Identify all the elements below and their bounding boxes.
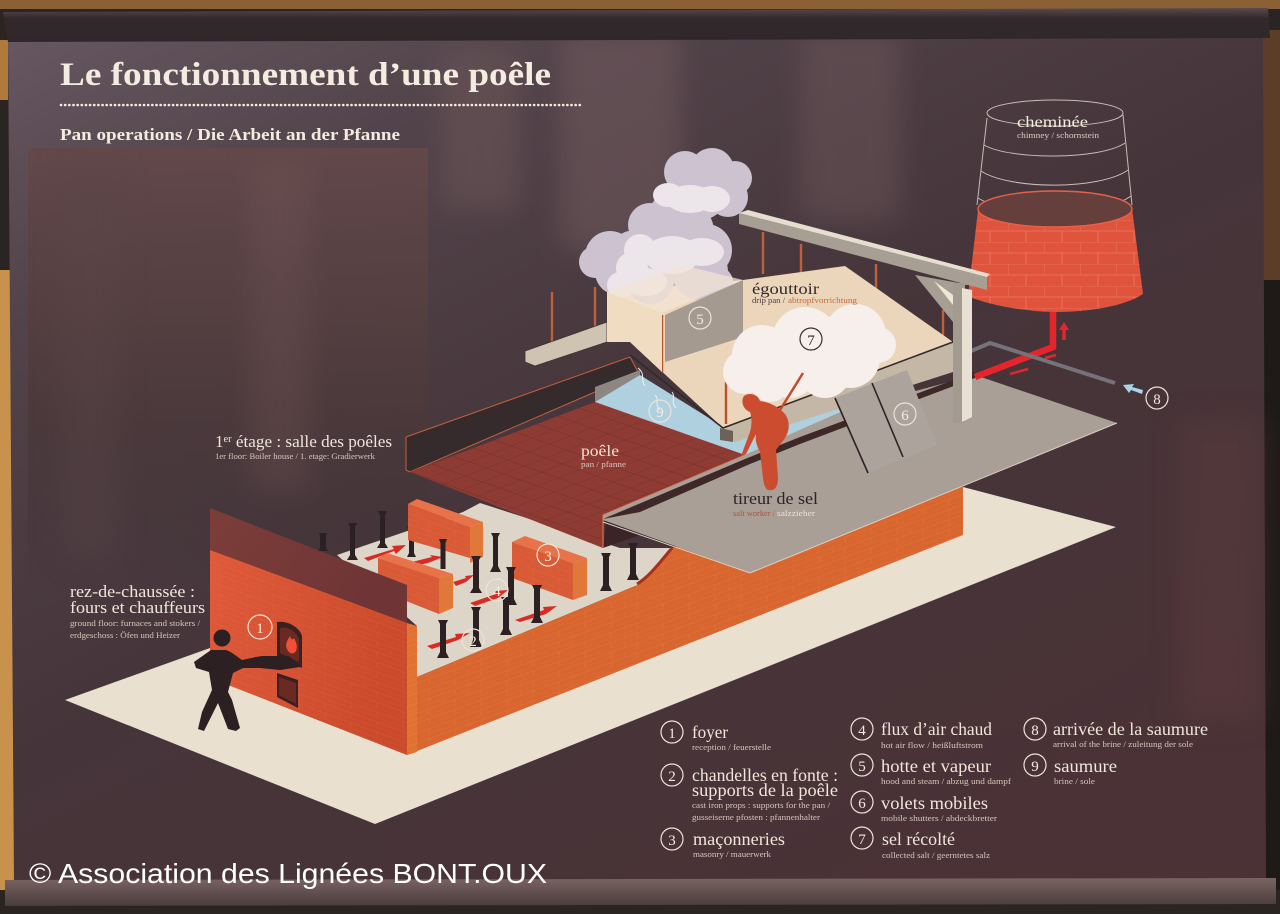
label: chimney: chimney / schornstein — [1017, 130, 1100, 140]
cast iron props behind block B — [439, 539, 447, 569]
masonry block B — [378, 553, 453, 614]
label: ground floor: fours et chauffeurs — [70, 598, 205, 617]
label: drip pan: drip pan / — [752, 295, 786, 305]
brine tank — [595, 368, 845, 460]
legend item 1 — [661, 721, 771, 752]
legend item 8 — [1024, 718, 1208, 749]
copyright watermark: © Association des Lignées BONT.OUX — [29, 858, 547, 889]
title: Le fonctionnement d’une poêle — [60, 57, 551, 93]
legend item 7: sel récolté — [882, 829, 955, 849]
label: first floor — [215, 432, 392, 461]
hot air duct — [975, 312, 1069, 377]
marker 3 — [537, 544, 559, 566]
legend item 5 — [851, 754, 1011, 786]
marker 7 — [800, 328, 822, 350]
label: salt worker: salzzieher — [777, 508, 815, 518]
legend item 7 — [851, 827, 990, 860]
drip pan — [607, 266, 953, 442]
legend item 2: supports de la poêle — [692, 780, 838, 800]
drip pan channel — [525, 322, 607, 366]
label: chimney — [1017, 114, 1100, 140]
label: first floor: 1 — [215, 432, 223, 451]
legend item 2 — [661, 764, 838, 822]
legend item 2: chandelles en fonte : — [692, 765, 838, 785]
label: ground floor: rez-de-chaussée : — [70, 582, 195, 601]
number markers in diagram — [248, 328, 1168, 651]
hood and steam panels: 5 — [696, 312, 704, 328]
legend item 6: mobile shutters / abdeckbretter — [881, 813, 997, 823]
furnace brick side wall — [407, 487, 963, 755]
support rods: back — [552, 232, 943, 348]
brine arrow — [1123, 384, 1143, 394]
legend item 5: 5 — [858, 759, 866, 775]
label: ground floor: ground floor: furnaces and stokers / — [70, 618, 201, 628]
marker 4: 4 — [493, 584, 501, 600]
legend item 8: arrivée de la saumure — [1053, 719, 1208, 739]
marker 1: 1 — [256, 621, 264, 637]
label: ground floor — [70, 582, 205, 640]
steam highlights — [607, 183, 730, 298]
marker 4 — [486, 579, 508, 601]
brine pipe — [933, 343, 1115, 383]
shutters: 6 — [901, 408, 909, 424]
legend item 6: volets mobiles — [881, 793, 988, 813]
furnace front wall — [210, 508, 417, 755]
hot air flow arrows — [364, 545, 557, 649]
brick tie strip under pan — [603, 517, 640, 548]
marker 3: 3 — [544, 549, 552, 565]
pan rear wall — [406, 357, 638, 472]
label: drip pan: égouttoir — [752, 281, 820, 298]
legend item 4: 4 — [858, 723, 866, 739]
legend item 7: 7 — [858, 832, 866, 848]
front cast iron props — [437, 533, 639, 658]
label: drip pan — [752, 281, 858, 305]
beam structure — [739, 210, 990, 423]
legend item 8: 8 — [1031, 723, 1039, 739]
legend item 4: hot air flow / heißluftstrom — [881, 740, 983, 750]
legend item 9: saumure — [1054, 756, 1117, 776]
collected salt pile — [723, 304, 896, 402]
legend item 1: 1 — [668, 726, 676, 742]
label: pan: pan / pfanne — [581, 459, 626, 469]
legend item 6: 6 — [858, 796, 866, 812]
marker 7: 7 — [807, 333, 815, 349]
shutters — [835, 370, 937, 473]
marker 8 — [1146, 387, 1168, 409]
label: salt worker: salt worker / — [733, 508, 776, 518]
label: pan — [581, 443, 626, 469]
icon: salt worker with rake — [741, 373, 803, 490]
label: first floor: er — [224, 434, 232, 445]
legend item 3: 3 — [668, 833, 676, 849]
legend item 2: cast iron props : supports for the pan / — [692, 800, 831, 810]
label: salt worker — [733, 489, 818, 518]
label: ground floor: erdgeschoss : Öfen und Heizer — [70, 630, 180, 640]
legend item 3 — [661, 828, 785, 859]
upper floor slab — [603, 372, 1117, 573]
marker 2 — [462, 629, 484, 651]
legend item 5: hotte et vapeur — [881, 756, 991, 776]
marker 8: 8 — [1153, 392, 1161, 408]
legend item 1: foyer — [692, 722, 728, 742]
legend item 9: brine / sole — [1054, 776, 1095, 786]
subtitle: Pan operations / Die Arbeit an der Pfanne — [60, 125, 400, 144]
legend item 5: hood and steam / abzug und dampf — [881, 776, 1011, 786]
legend item 3: maçonneries — [693, 829, 785, 849]
legend item 9 — [1024, 754, 1117, 786]
icon: furnace doors with fire — [277, 622, 302, 708]
ground floor interior — [337, 503, 672, 677]
legend item 1: reception / feuerstelle — [692, 742, 771, 752]
legend item 4 — [851, 718, 992, 750]
legend — [661, 718, 1208, 860]
legend item 4: flux d’air chaud — [881, 719, 992, 739]
label: pan: poêle — [581, 443, 619, 460]
masonry block A — [408, 499, 483, 563]
legend item 8: arrival of the brine / zuleitung der sole — [1053, 739, 1193, 749]
title dotted rule — [61, 104, 581, 106]
label: drip pan: abtropfvorrichtung — [788, 295, 858, 305]
masonry block C — [512, 536, 587, 600]
legend item 3: masonry / mauerwerk — [693, 849, 772, 859]
legend item 6 — [851, 791, 997, 823]
chimney brick base — [968, 190, 1143, 312]
marker 1 — [248, 615, 272, 639]
legend item 2: 2 — [668, 769, 676, 785]
hood and steam panels — [607, 265, 743, 372]
pan — [410, 402, 745, 548]
label: first floor: étage : salle des poêles — [232, 432, 392, 451]
marker 2: 2 — [469, 634, 477, 650]
rods: front — [662, 315, 726, 424]
label: salt worker: tireur de sel — [733, 489, 818, 508]
ground floor slab — [65, 487, 1116, 824]
marker 9 — [649, 400, 671, 422]
chimney ghost outline — [977, 100, 1132, 213]
label: chimney: cheminée — [1017, 114, 1088, 131]
marker 9: 9 — [656, 405, 664, 421]
icon: stoker silhouette — [194, 630, 300, 731]
steam cloud — [579, 148, 752, 304]
legend item 2: gusseiserne pfosten : pfannenhalter — [692, 812, 820, 822]
label: first floor: 1er floor: Boiler house / 1. etage: Gradierwerk — [215, 452, 376, 461]
legend item 9: 9 — [1031, 759, 1039, 775]
back cast iron props — [318, 511, 416, 560]
legend item 7: collected salt / geerntetes salz — [882, 850, 990, 860]
